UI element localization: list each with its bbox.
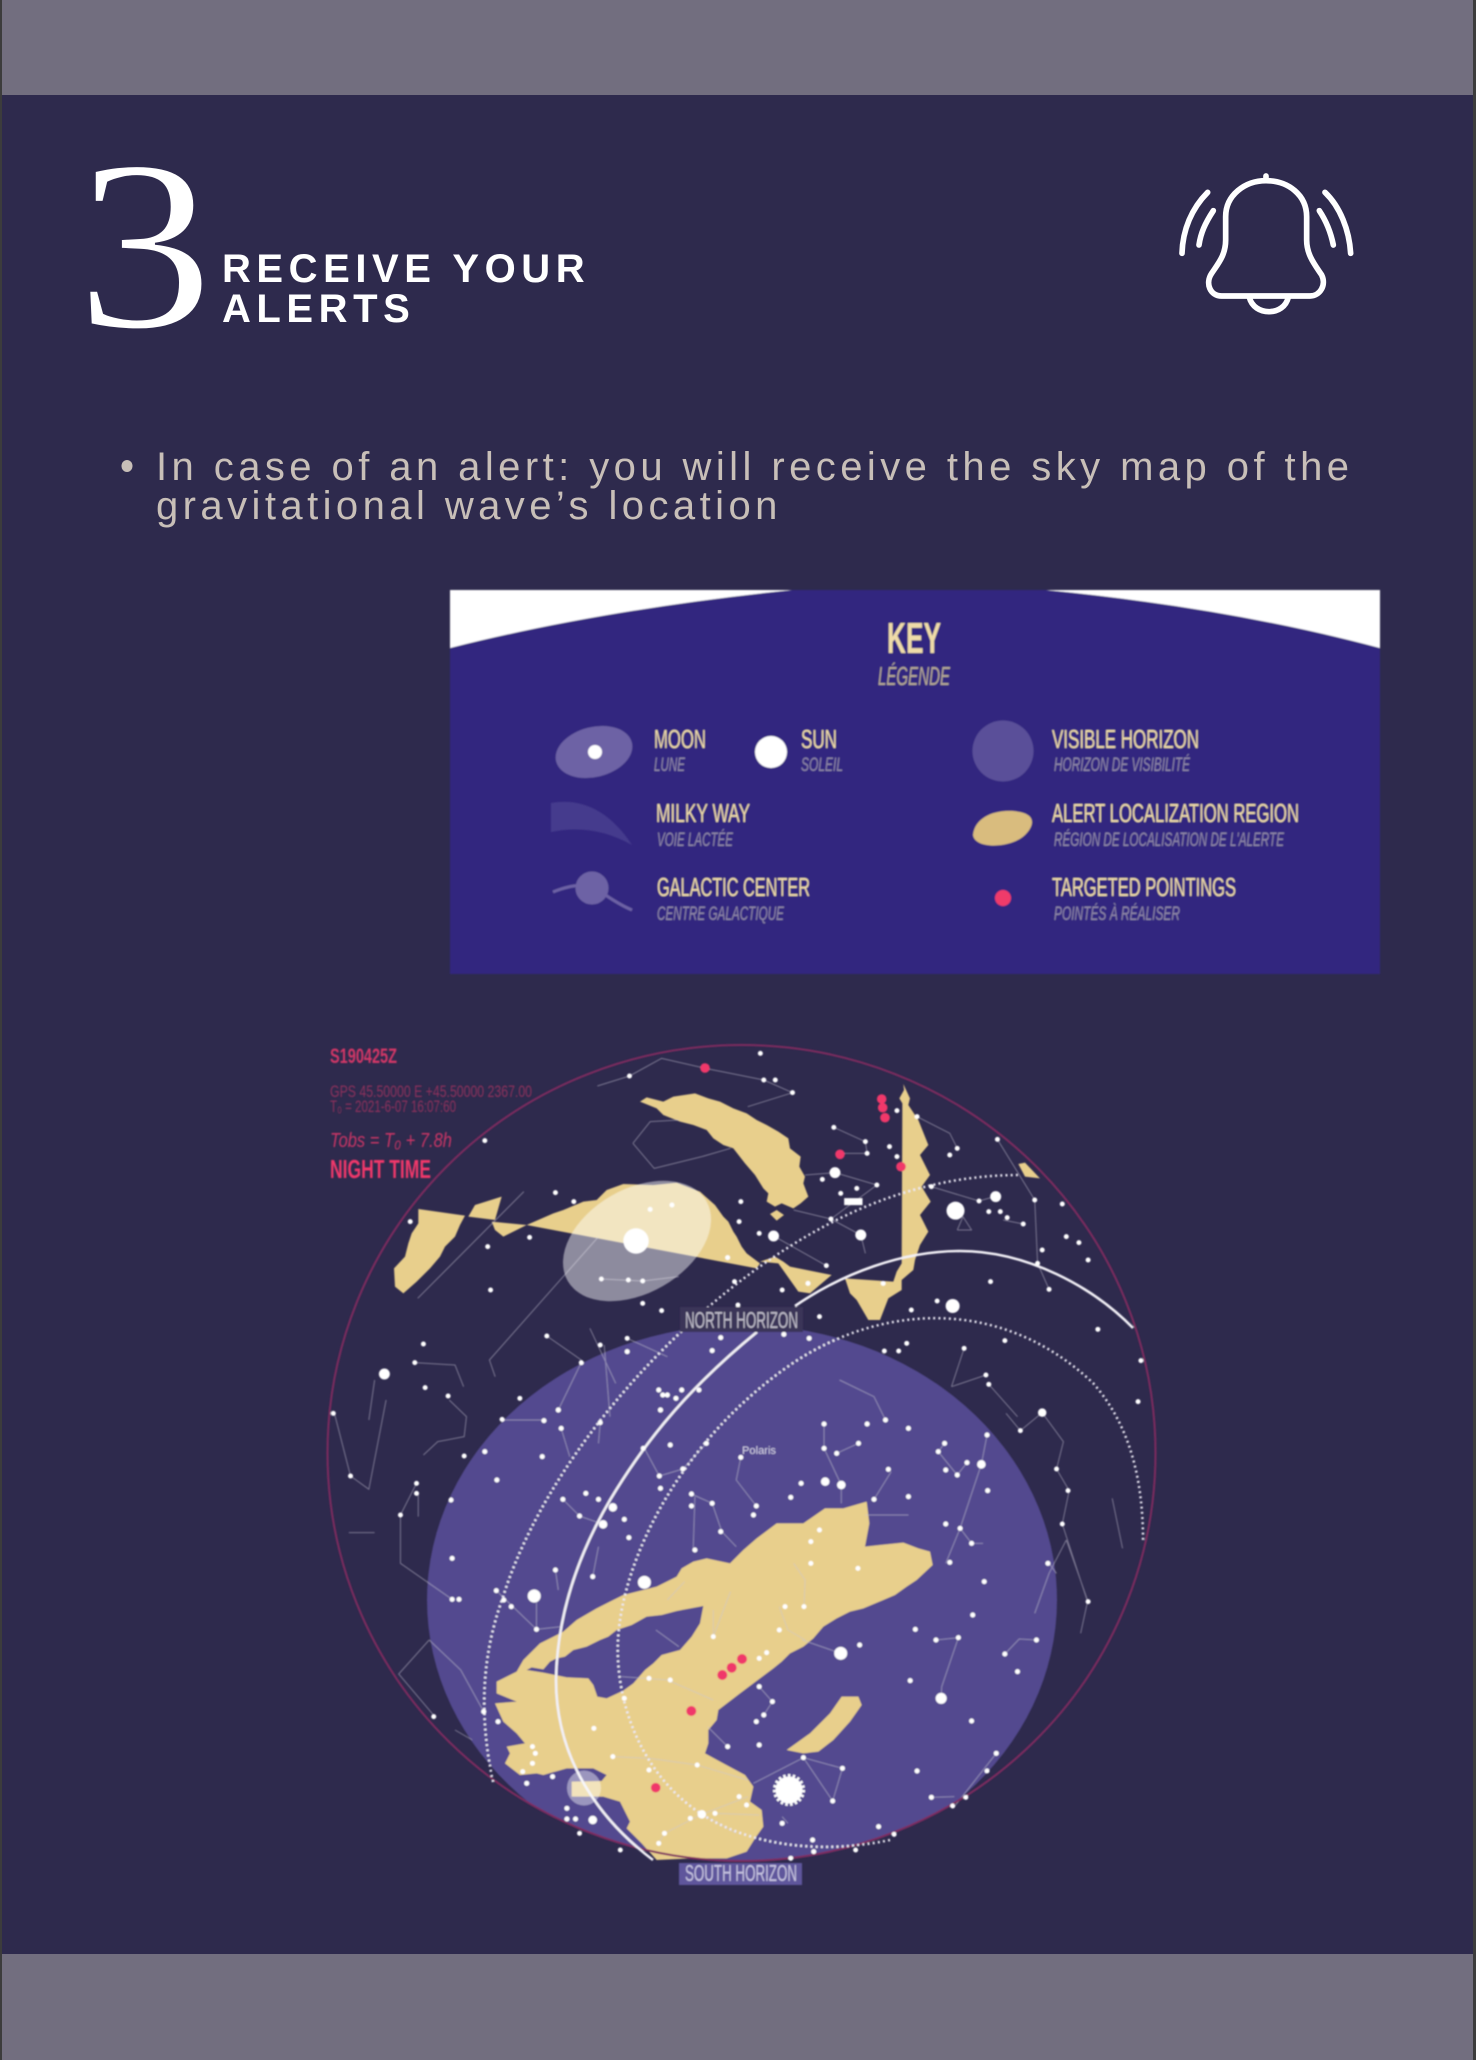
legend labels: SUN	[801, 724, 837, 754]
alert details: GPS 45.50000 E +45.50000 2367.00	[330, 1082, 532, 1101]
constellations: lower	[334, 1400, 1123, 1843]
right page edge	[1473, 0, 1476, 2060]
legend labels: GALACTIC CENTER	[657, 872, 810, 902]
heading	[222, 247, 590, 331]
panel: legend key: CENTRE GALACTIQUE	[657, 904, 784, 925]
icon: bell	[1182, 176, 1351, 312]
icon: moon	[550, 718, 638, 786]
bullet text block	[122, 445, 1353, 528]
icon: visible horizon	[972, 720, 1034, 782]
visible horizon disc	[427, 1325, 1057, 1875]
top band	[2, 0, 1473, 95]
left page edge	[0, 0, 2, 2060]
heading: RECEIVE YOUR	[222, 247, 590, 291]
dotted arc: outer	[618, 1318, 1143, 1847]
panel: legend key: VOIE LACTÉE	[657, 830, 733, 851]
moon disc	[623, 1228, 649, 1254]
alert details	[330, 1045, 532, 1184]
south horizon label	[679, 1860, 802, 1886]
icon: alert localization region	[973, 811, 1032, 846]
panel: legend key: KEY	[887, 614, 941, 663]
dotted arc: inner	[484, 1175, 1020, 1782]
icon: targeted pointing	[995, 890, 1011, 906]
chart: sky map	[328, 1045, 1156, 1886]
legend labels: MILKY WAY	[656, 798, 750, 828]
north horizon label: NORTH HORIZON	[685, 1307, 798, 1333]
icon: sun	[755, 736, 787, 768]
alert localization region: upper left	[394, 1093, 808, 1293]
alert details: Tobs = T₀ + 7.8h	[330, 1130, 452, 1152]
icon: milky way	[551, 802, 632, 845]
legend labels	[654, 724, 1299, 902]
bullet text block: gravitational wave’s location	[156, 484, 782, 528]
heading: ALERTS	[222, 287, 415, 331]
sky boundary circle	[328, 1045, 1156, 1861]
alert localization region: lower	[495, 1502, 933, 1860]
targeted pointings	[651, 1063, 906, 1792]
alert details: S190425Z	[330, 1045, 397, 1068]
legend labels: VISIBLE HORIZON	[1052, 724, 1199, 754]
panel: legend key: POINTÉS À RÉALISER	[1054, 904, 1180, 925]
panel: legend key: SOLEIL	[801, 755, 843, 776]
south horizon label: SOUTH HORIZON	[685, 1860, 797, 1886]
sun	[774, 1776, 804, 1804]
horizon arc	[556, 1251, 1133, 1860]
legend labels: TARGETED POINTINGS	[1052, 872, 1236, 902]
north horizon label	[680, 1307, 803, 1333]
panel: legend key: RÉGION DE LOCALISATION DE L'ALERTE	[1054, 830, 1284, 851]
bottom band	[2, 1954, 1473, 2060]
Polaris label: Polaris	[742, 1445, 777, 1457]
alert localization region: upper right	[760, 1084, 1040, 1320]
moon glow: lower	[567, 1770, 601, 1806]
legend labels: MOON	[654, 724, 706, 754]
constellations: upper	[369, 1058, 1049, 1420]
panel: legend key	[450, 590, 1380, 974]
alert details: T₀ = 2021-6-07 16:07:60	[330, 1097, 456, 1116]
legend labels: ALERT LOCALIZATION REGION	[1052, 798, 1299, 828]
stars: lower	[333, 1410, 1088, 1858]
panel: legend key: LUNE	[654, 755, 685, 776]
step number: 3	[76, 111, 213, 380]
moon glow: upper	[542, 1156, 732, 1326]
bullet text block: In case of an alert: you will receive the sky map of the	[156, 445, 1353, 489]
alert details: NIGHT TIME	[330, 1154, 431, 1184]
panel: legend key: HORIZON DE VISIBILITÉ	[1054, 755, 1190, 776]
icon: galactic center	[553, 873, 632, 910]
panel: legend key: LÉGENDE	[878, 661, 950, 691]
stars: upper	[384, 1053, 1141, 1412]
